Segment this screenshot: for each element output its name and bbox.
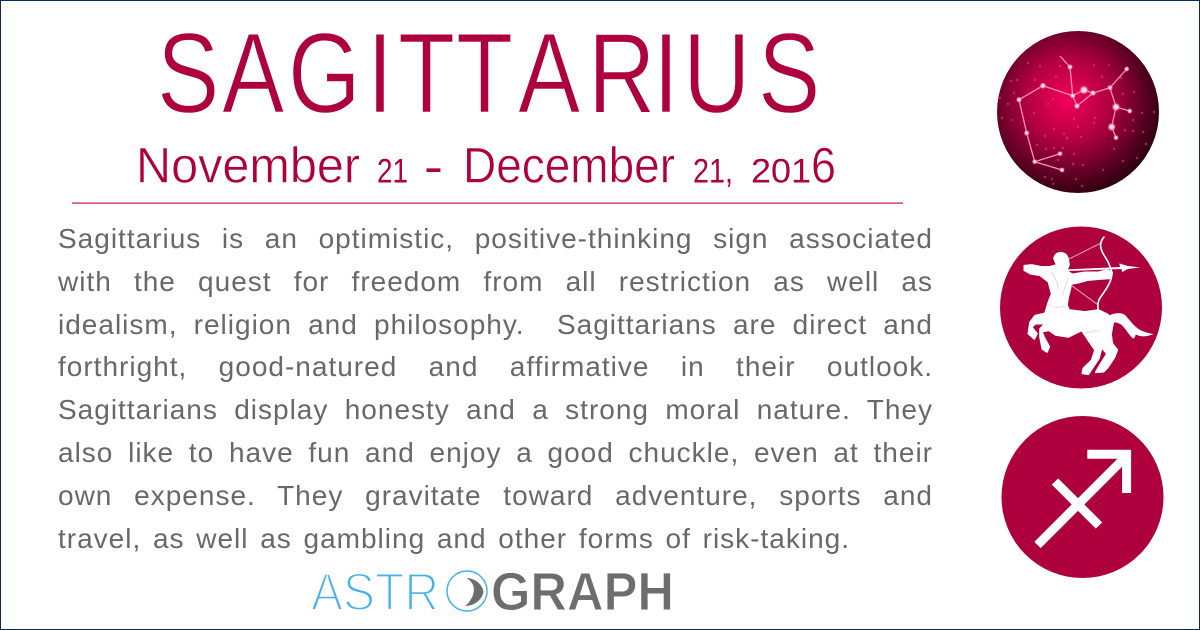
body text: travel, as well as gambling and other forms of risk-taking.: [58, 523, 850, 554]
tail: [1108, 313, 1154, 339]
subtitle: dates: 6: [811, 138, 836, 194]
logo: Astrograph: [311, 562, 674, 622]
body text: own expense. They gravitate toward adventure, sports and: [58, 480, 933, 511]
divider rule: [72, 202, 903, 204]
icon: sagittarius glyph: [1002, 416, 1164, 578]
body silhouette: [1024, 253, 1117, 374]
body text: idealism, religion and philosophy. Sagittarians are direct and: [58, 309, 933, 340]
subtitle: dates: 21: [377, 153, 408, 191]
subtitle: dates: -: [424, 141, 443, 193]
body text: Sagittarius is an optimistic, positive-thinking sign associated: [58, 223, 933, 254]
body text: with the quest for freedom from all restriction as well as: [58, 266, 933, 297]
body text: forthright, good-natured and affirmative in their outlook.: [58, 351, 933, 382]
title: SAGITTARIUS: [157, 11, 820, 138]
subtitle: dates: November: [136, 138, 360, 194]
bowstrings: [1069, 243, 1101, 304]
logo: Astrograph: GRAPH: [491, 562, 674, 622]
arrow: [1068, 263, 1140, 272]
body text: also like to have fun and enjoy a good chuckle, even at their: [58, 437, 933, 468]
body text: [58, 223, 933, 554]
subtitle: dates: December: [463, 138, 675, 194]
muscle shading: [1048, 272, 1100, 333]
icon: centaur archer: [1000, 226, 1162, 388]
icon: constellation globe: [997, 31, 1159, 193]
logo: Astrograph: ASTR: [311, 563, 439, 622]
subtitle: dates: 21,: [693, 153, 733, 191]
bow: [1098, 237, 1112, 310]
body text: Sagittarians display honesty and a strong moral nature. They: [58, 394, 933, 425]
subtitle: dates: [136, 138, 836, 194]
subtitle: dates: 201: [751, 153, 811, 191]
